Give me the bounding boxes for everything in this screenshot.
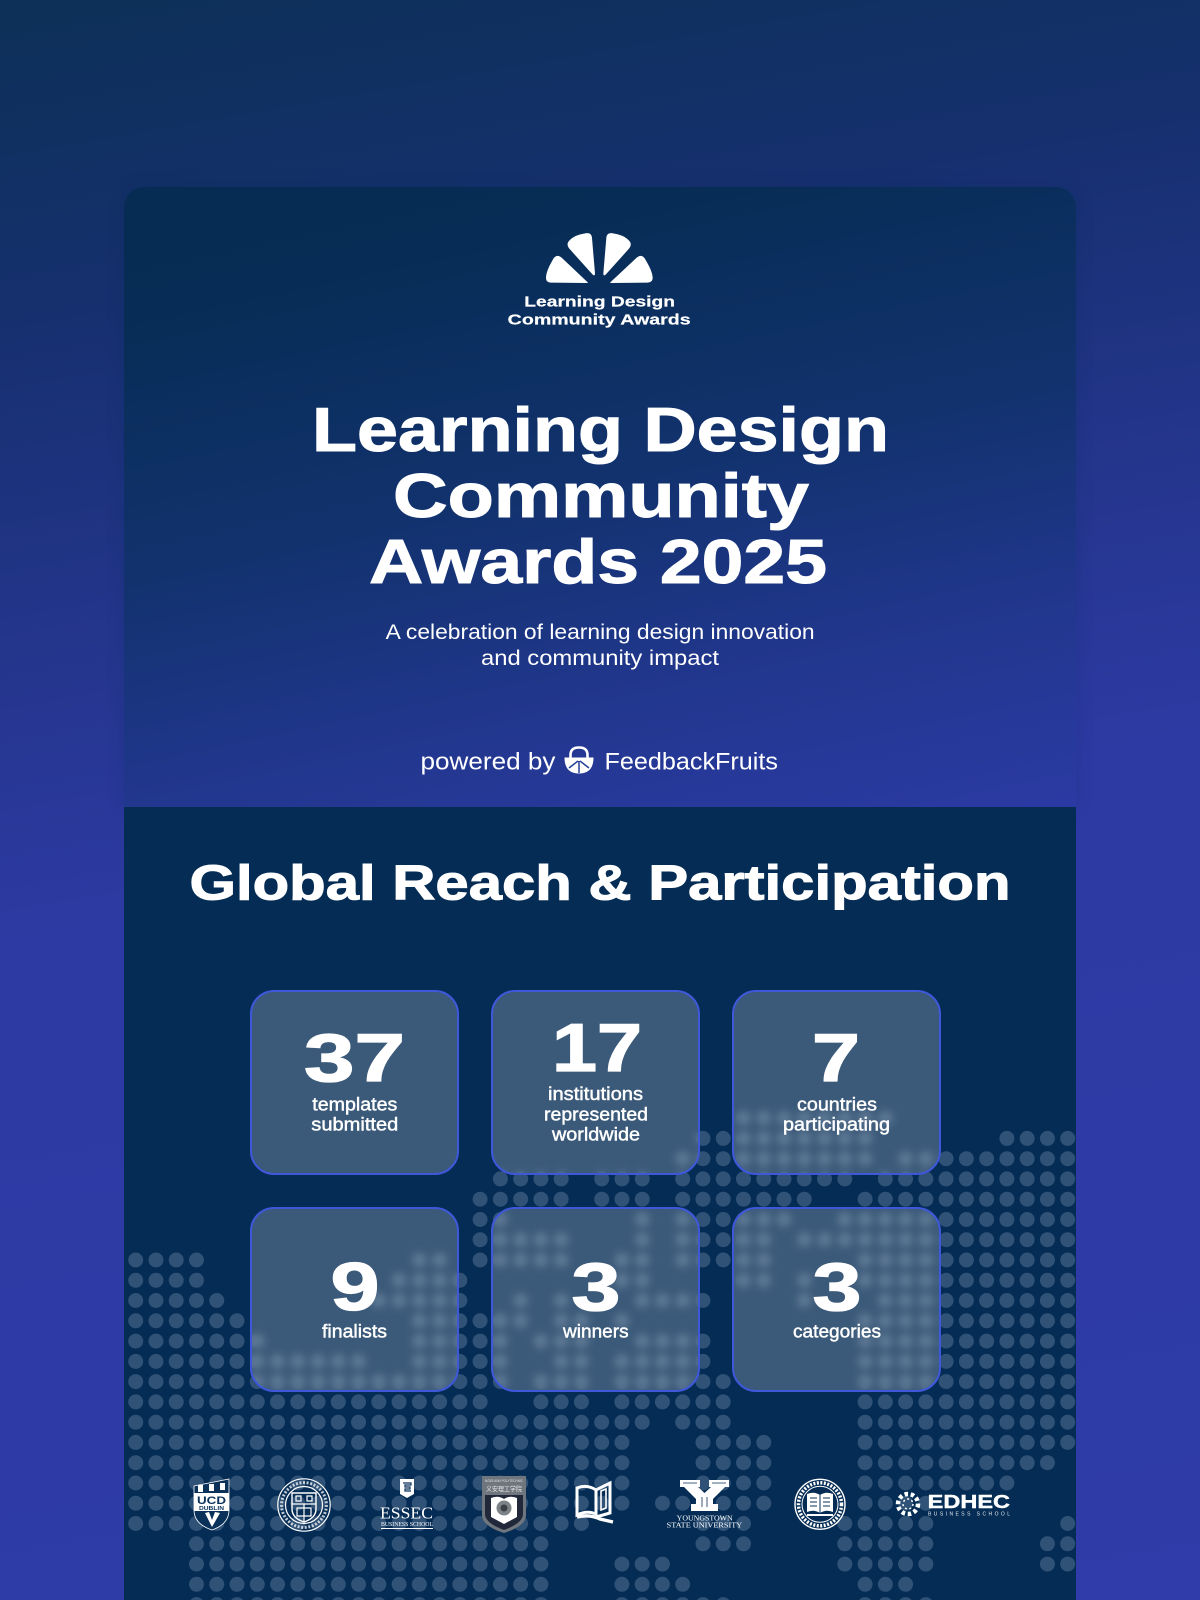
stat card: finalists <box>250 1207 459 1392</box>
logo: Nan Hua Polytechnic shield: 义安理工学院 <box>486 1484 522 1493</box>
logo: Youngstown State University: YOUNGSTOWN <box>677 1514 733 1523</box>
stat card: winners <box>491 1207 700 1392</box>
logo: ESSEC Business School: BUSINESS SCHOOL <box>381 1521 433 1528</box>
logo: ESSEC Business School <box>380 1479 433 1529</box>
logo: UCD Dublin: UCD <box>197 1495 226 1507</box>
subtitle: A celebration of learning design innovation <box>386 620 815 644</box>
icon: FeedbackFruits fruit basket <box>564 748 594 774</box>
subtitle <box>386 620 815 670</box>
panel: header <box>124 187 1076 807</box>
stat card: categories <box>732 1207 941 1392</box>
logo: University of California Irvine seal <box>795 1479 845 1529</box>
stat card: finalists: 9 <box>330 1249 380 1325</box>
panel: global reach <box>124 807 1076 1600</box>
stat card: templates submitted: submitted <box>311 1114 398 1135</box>
logo: EDHEC Business School <box>898 1492 1010 1518</box>
stat card: winners: winners <box>562 1320 629 1341</box>
stat card: winners: 3 <box>572 1249 620 1325</box>
stat card: countries: 7 <box>812 1020 860 1096</box>
stat card: institutions <box>491 990 700 1175</box>
powered by FeedbackFruits: powered by <box>420 748 556 776</box>
stat card: templates submitted: templates <box>312 1094 397 1114</box>
stat card: categories: categories <box>793 1320 881 1341</box>
icon: awards petal logo <box>546 233 653 283</box>
logo: Youngstown State University <box>667 1480 743 1530</box>
stat card: templates submitted <box>250 990 459 1175</box>
logo: ESSEC Business School: ESSEC <box>380 1504 433 1523</box>
stat card: countries <box>732 990 941 1175</box>
heading: global reach: Global Reach & Participation <box>190 856 1010 910</box>
logo: Nan Hua Polytechnic shield <box>482 1476 526 1533</box>
stat card: countries: participating <box>783 1114 890 1135</box>
logo: EDHEC Business School: BUSINESS SCHOOL <box>928 1512 1010 1518</box>
logo: EDHEC Business School: EDHEC <box>928 1492 1010 1512</box>
logo: Youngstown State University: STATE UNIVERSITY <box>667 1520 743 1530</box>
title <box>312 396 889 597</box>
logo: Nan Hua Polytechnic shield: NGEE ANN POLYTECHNIC <box>485 1478 523 1483</box>
title: Awards 2025 <box>369 528 827 597</box>
logo: UCD Dublin <box>194 1479 229 1530</box>
stat card: countries: countries <box>797 1094 877 1114</box>
subtitle: and community impact <box>481 646 719 670</box>
title: Community <box>393 462 810 531</box>
powered by FeedbackFruits <box>420 748 778 776</box>
stat card: categories: 3 <box>812 1249 862 1325</box>
institution logos row <box>194 1476 1010 1533</box>
logo: UCD Dublin: DUBLIN <box>199 1506 225 1512</box>
stat card: institutions: represented <box>544 1104 648 1124</box>
logo wordmark: Learning Design <box>524 294 675 311</box>
stat card: institutions: worldwide <box>551 1124 640 1145</box>
stat card: templates submitted: 37 <box>304 1020 405 1096</box>
powered by FeedbackFruits: FeedbackFruits <box>604 748 778 776</box>
stat card: institutions: institutions <box>548 1083 643 1104</box>
stat card: institutions: 17 <box>552 1010 642 1086</box>
stat card: finalists: finalists <box>322 1320 387 1341</box>
logo: open book mark <box>577 1483 613 1522</box>
logo wordmark <box>508 294 691 328</box>
logo: Cornell University seal <box>278 1479 330 1531</box>
title: Learning Design <box>312 396 889 465</box>
header text and branding <box>190 233 1010 910</box>
logo wordmark: Community Awards <box>508 311 691 328</box>
